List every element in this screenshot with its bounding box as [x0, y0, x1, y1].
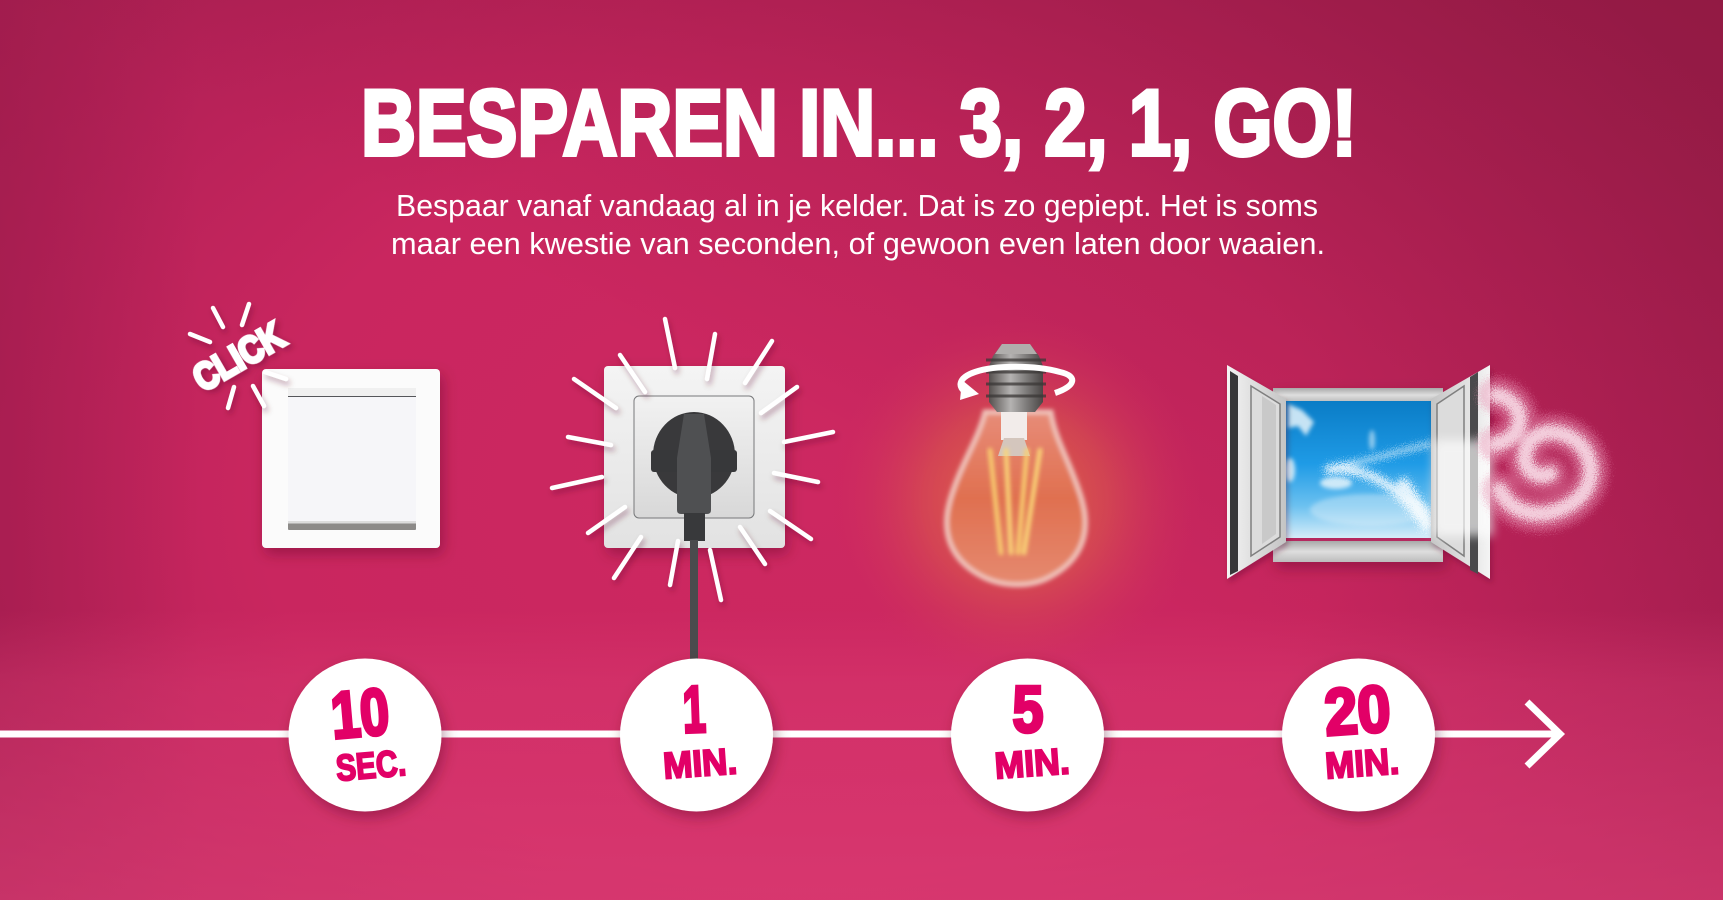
subtitle [391, 188, 1325, 261]
subtitle: Bespaar vanaf vandaag al in je kelder. Dat is zo gepiept. Het is soms [396, 188, 1318, 223]
click label with rays: CLICK [186, 315, 292, 400]
subtitle: maar een kwestie van seconden, of gewoon even laten door waaien. [391, 226, 1325, 261]
left sash [1227, 365, 1286, 579]
plug [651, 412, 737, 660]
wind gust [1433, 395, 1591, 536]
icon: open window [1227, 365, 1591, 579]
socket rays [552, 319, 833, 600]
title: BESPAREN IN... 3, 2, 1, GO! [361, 70, 1357, 175]
step: 10 sec [288, 658, 442, 812]
sky view [1285, 401, 1431, 541]
step: 20 min: MIN. [1324, 740, 1400, 787]
step: 1 min [620, 658, 773, 812]
step: 20 min: 20 [1322, 671, 1393, 749]
icon: light switch [262, 369, 440, 548]
right sash [1431, 365, 1490, 579]
step: 1 min: MIN. [662, 740, 738, 787]
icon: power socket with plug [604, 366, 785, 660]
icon: rotate arrow around bulb [960, 367, 1072, 400]
step: 10 sec: 10 [328, 674, 392, 752]
step: 20 min [1282, 658, 1435, 812]
step: 5 min: 5 [1012, 672, 1044, 746]
step: 10 sec: SEC. [334, 742, 408, 789]
step: 1 min: 1 [681, 672, 707, 746]
step: 5 min: MIN. [993, 740, 1071, 787]
step: 5 min [951, 658, 1104, 812]
icon: light bulb [831, 315, 1201, 685]
timeline with arrow [0, 702, 1560, 766]
